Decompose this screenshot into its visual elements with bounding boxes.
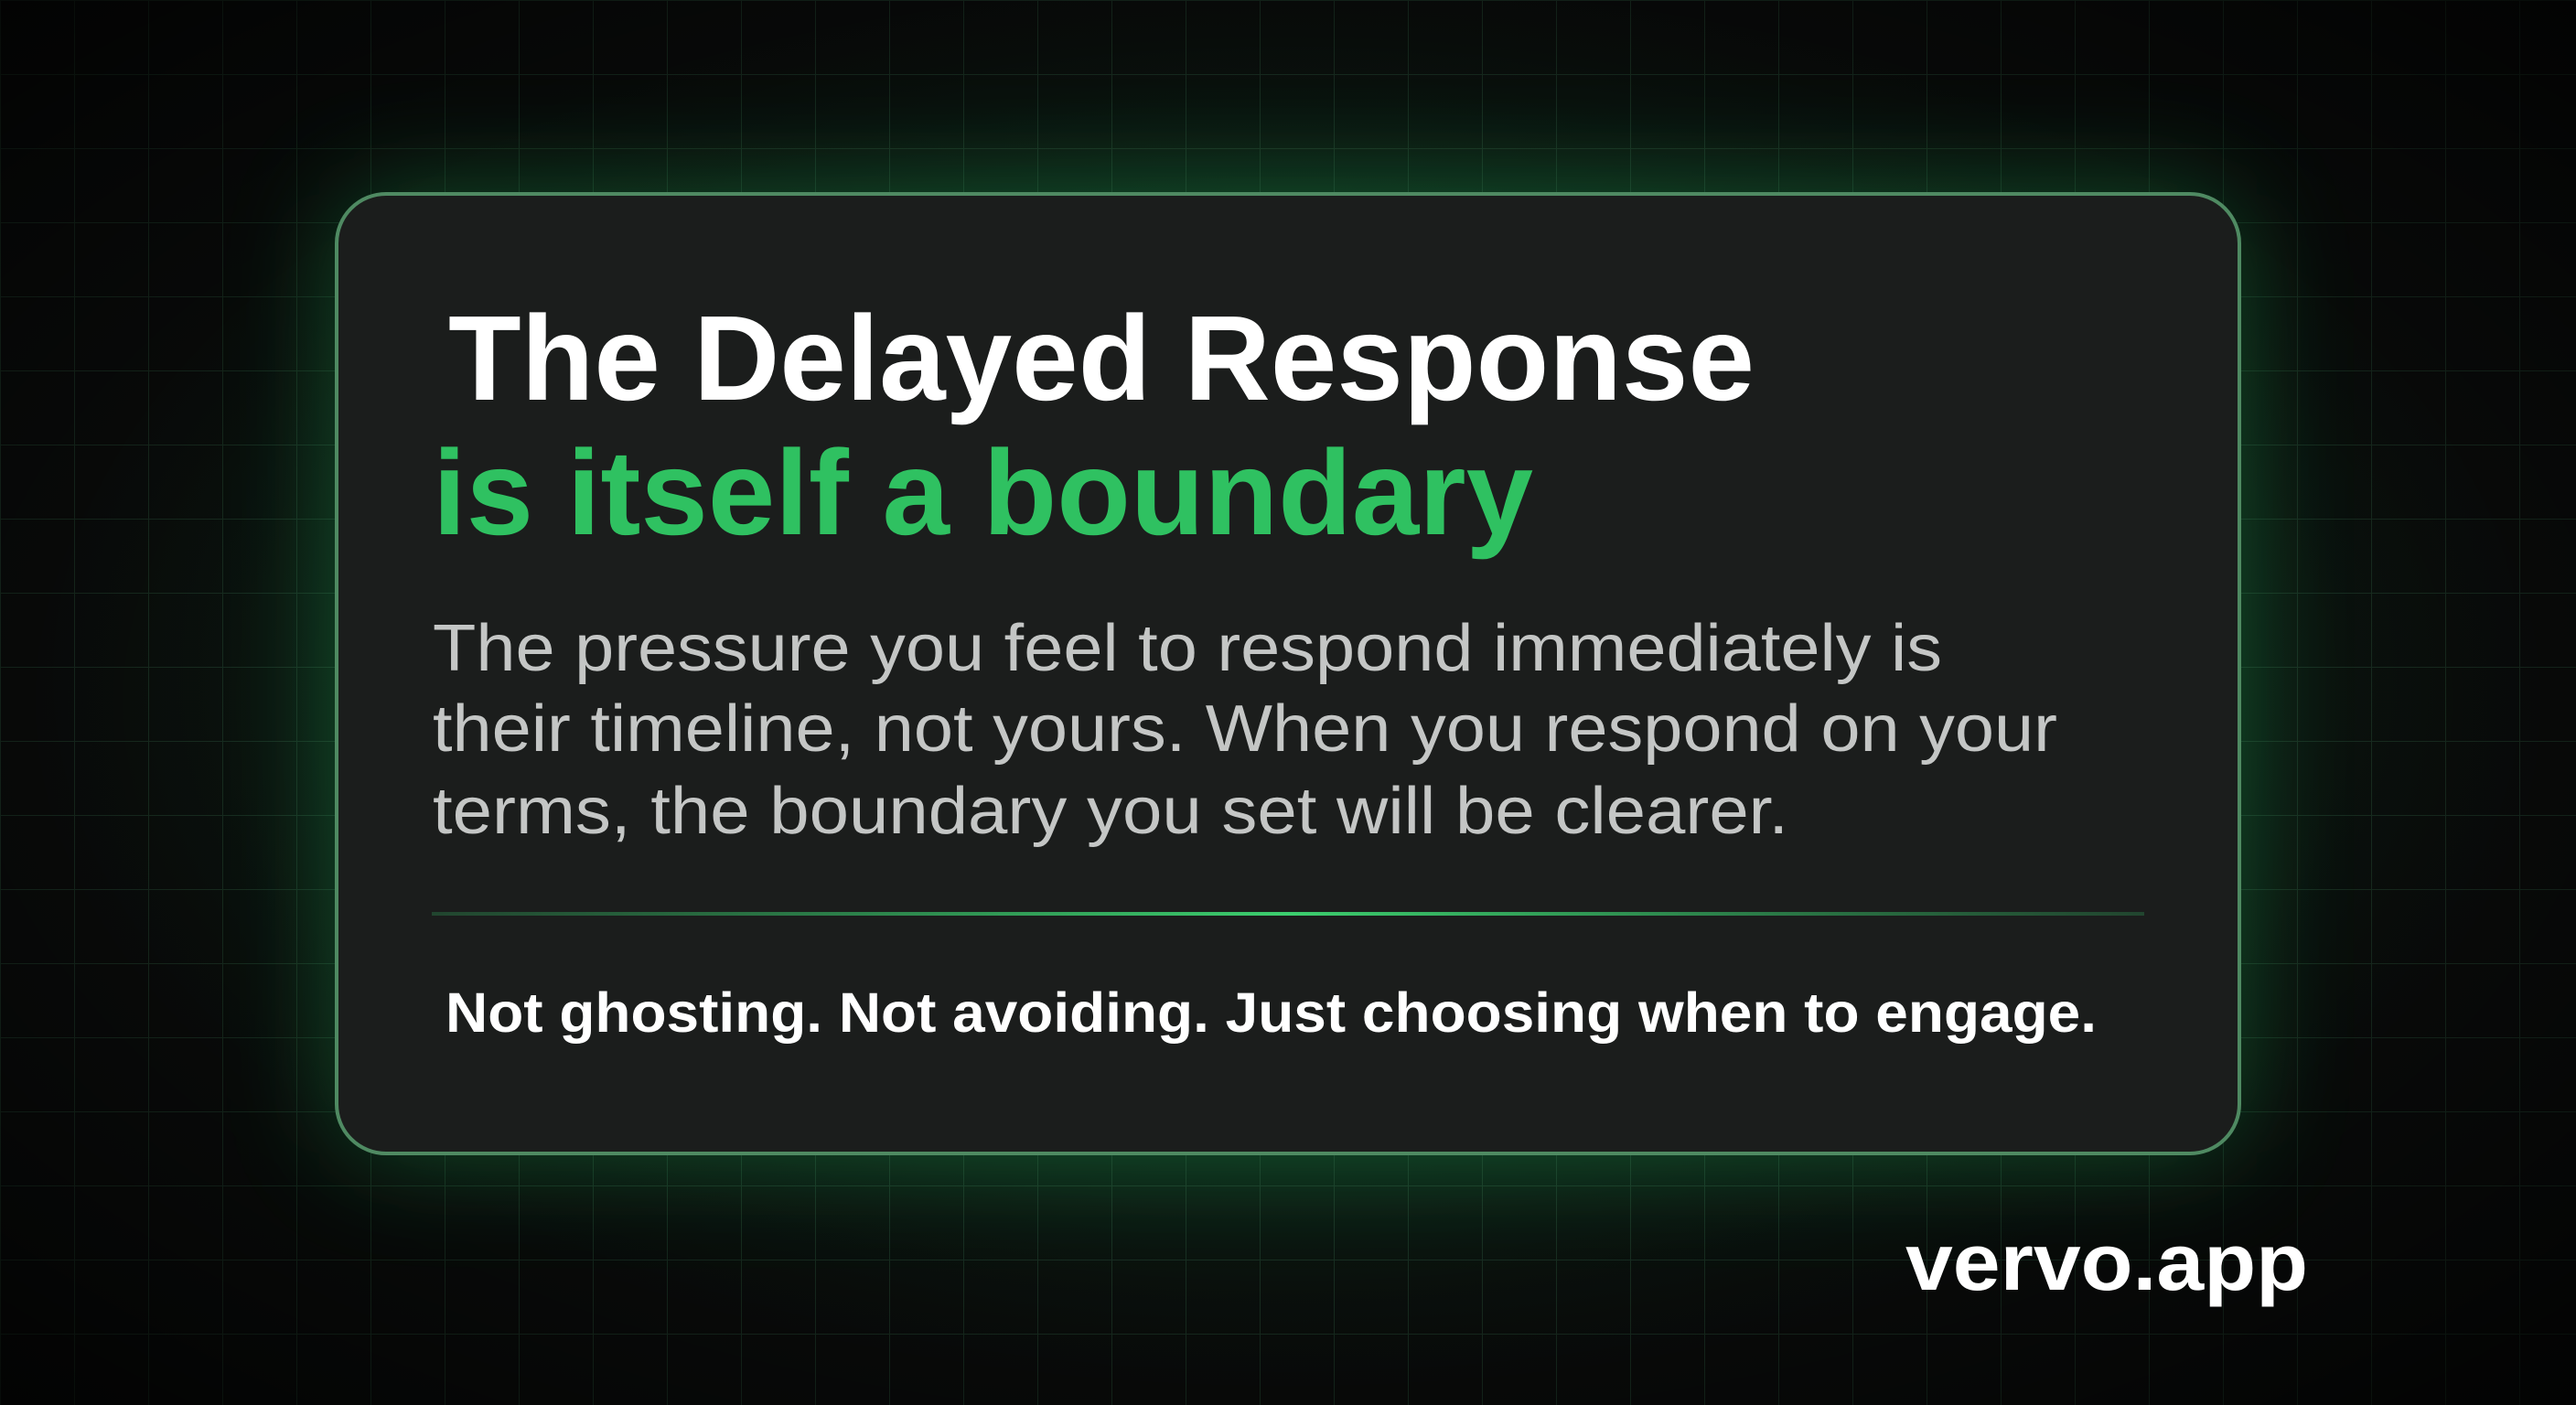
body text: The pressure you feel to respond immediately is xyxy=(433,612,1942,685)
panel: card xyxy=(337,194,2239,1153)
body text: terms, the boundary you set will be clearer. xyxy=(433,775,1788,848)
tagline: Not ghosting. Not avoiding. Just choosing when to engage. xyxy=(445,981,2097,1044)
title line 2: is itself a boundary xyxy=(433,425,1533,560)
body text: their timeline, not yours. When you respond on your xyxy=(433,692,2057,766)
card glow xyxy=(337,194,2239,1153)
body text xyxy=(433,612,2057,848)
brand: vervo.app: vervo.app xyxy=(1905,1217,2308,1307)
title line 1: The Delayed Response xyxy=(448,291,1755,425)
